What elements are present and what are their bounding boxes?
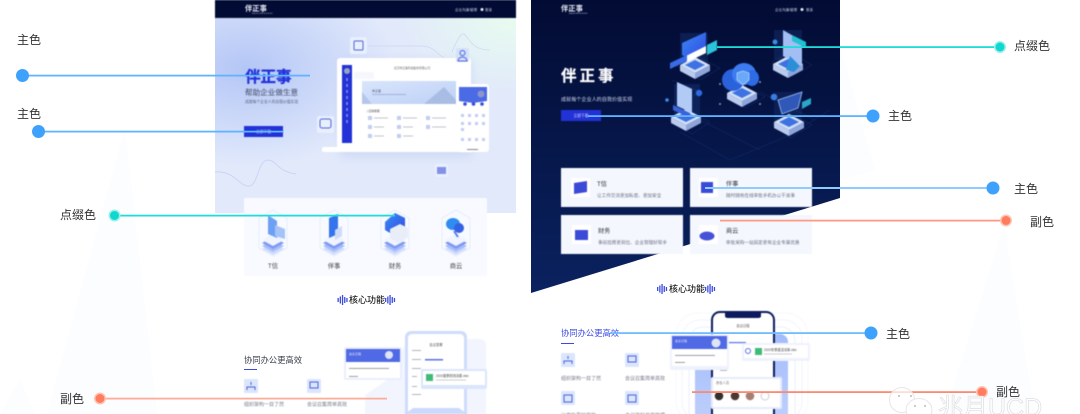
- hero heading: 伴正事: [245, 67, 292, 86]
- monitor tile: [670, 32, 717, 79]
- cart tile: [771, 92, 811, 136]
- callout: secondary colour attendees right: [692, 385, 1020, 399]
- callout: primary colour card right: 主色: [1014, 182, 1038, 196]
- card T信: [561, 168, 683, 207]
- phone mockup with meeting notice left: [344, 331, 487, 414]
- callout: secondary colour card right: 副色: [1030, 215, 1054, 229]
- dark hero button: 立即下载: [573, 113, 589, 118]
- card 伴事: [690, 168, 812, 207]
- hero heading: [245, 67, 299, 104]
- phone mockup with attendees right: 2020年季度活动单.xlsx: [764, 347, 797, 352]
- dark hero heading: 伴正事: [561, 66, 617, 85]
- card 财务: [561, 215, 683, 254]
- card 商云: [690, 215, 812, 254]
- top navigation bar light: 登录: [485, 7, 492, 12]
- card T信: T信: [597, 180, 607, 188]
- phone mockup with meeting notice left: 会议签署: [429, 342, 443, 347]
- 商云 item: 商云: [450, 261, 462, 270]
- card T信: 让工作交流更加私密、更加安全: [597, 192, 662, 199]
- T信 item: [259, 210, 287, 270]
- section heading right: core function: 核心功能: [669, 283, 705, 294]
- laptop dashboard mockup: 伴正事: [372, 88, 381, 93]
- callout: primary colour heading right: [610, 326, 910, 341]
- callout: primary colour heading right: 主色: [886, 327, 910, 341]
- callout: primary colour logo left: [16, 33, 310, 82]
- callout: secondary colour left: [60, 392, 387, 406]
- panel: light theme web page: [215, 0, 516, 414]
- top navigation bar light: 企业沟通/管理: [455, 7, 477, 12]
- card 伴事: 伴事: [726, 180, 738, 188]
- callout: secondary colour left: 副色: [60, 392, 84, 406]
- phone mockup with attendees right: 参会人员: [716, 380, 730, 385]
- phone mockup light: [457, 84, 489, 152]
- watermark: [890, 388, 1042, 414]
- section heading left: core function: 核心功能: [349, 294, 385, 305]
- callout: secondary colour attendees right: 副色: [996, 385, 1020, 399]
- product card with four icons: [244, 198, 487, 276]
- 商云 item: [442, 210, 470, 270]
- 财务 item: 财务: [389, 261, 402, 270]
- dark top nav: 企业沟通/管理: [775, 7, 797, 12]
- collaboration section right: 协同办公更高效: [561, 328, 620, 338]
- hero button: 立即下载: [256, 129, 271, 134]
- feature grid: [561, 353, 665, 414]
- hero heading: 成就每个企业人的自我价值实现: [245, 99, 298, 104]
- top navigation bar light: 伴正事: [245, 4, 268, 13]
- card 财务: 事前控费更到位、企业管理好帮手: [598, 239, 667, 246]
- phone mockup with attendees right: 会议日程: [736, 323, 750, 328]
- top navigation bar light: BANZHENGSHI: [252, 12, 273, 15]
- callout: primary colour button left: [17, 107, 283, 138]
- 财务 item: [381, 210, 409, 270]
- callout: accent colour right: 点缀色: [1014, 39, 1050, 53]
- callout: primary colour button right: 主色: [888, 109, 912, 123]
- 伴事 item: [320, 210, 348, 270]
- isometric illustration: [665, 30, 830, 160]
- dark top nav: BANZHENGSHI: [569, 12, 588, 15]
- laptop dashboard mockup: [322, 58, 472, 157]
- callout: primary colour logo left: 主色: [17, 33, 41, 47]
- card 财务: 财务: [598, 227, 610, 235]
- feature: meeting: 会议召集简单高效: [307, 401, 347, 408]
- dark hero button: [561, 110, 601, 121]
- callout: accent colour left: [60, 208, 395, 222]
- phone tile: [772, 30, 806, 78]
- phone mockup with meeting notice left: 2020度季别流动表.xlsx: [436, 373, 469, 378]
- callout: primary colour button left: 主色: [17, 107, 41, 121]
- hero background light: [215, 18, 516, 213]
- top navigation bar light: [215, 0, 516, 18]
- card 伴事: 随时随地在线审批手机办公干滚事: [726, 192, 795, 199]
- callout: primary colour card right: [705, 182, 1038, 196]
- card 商云: 审批采购一站搞定更有企业专属优惠: [726, 239, 800, 246]
- dark hero heading: 成就每个企业人的自我价值实现: [561, 96, 632, 103]
- 伴事 item: 伴事: [328, 261, 341, 270]
- dark top nav: 伴正事: [561, 4, 584, 13]
- dark top nav: [561, 4, 814, 15]
- laptop dashboard mockup: | 应用教程: [367, 109, 380, 113]
- laptop dashboard mockup: 北京伴正事科技股份有限公司: [394, 66, 430, 70]
- callout: accent colour right: [717, 39, 1050, 53]
- dark top nav: 登录: [806, 7, 814, 12]
- card 商云: 商云: [726, 227, 738, 235]
- hero heading: 帮助企业做生意: [245, 87, 299, 97]
- T信 item: T信: [268, 261, 278, 270]
- callout: primary colour button right: [588, 109, 912, 123]
- floating icons: [317, 37, 469, 177]
- section heading right: core function: [657, 283, 715, 294]
- callout: accent colour left: 点缀色: [60, 208, 96, 222]
- dark feature cards: [561, 168, 812, 254]
- phone mockup with attendees right: 会议日程: [675, 338, 687, 343]
- dark hero heading: [561, 66, 632, 103]
- phone mockup with meeting notice left: 会议日程: [349, 351, 361, 356]
- phone mockup with attendees right: [670, 311, 810, 414]
- panel: dark theme web page: [531, 0, 840, 414]
- collaboration section left: [244, 355, 347, 408]
- dark hero polygon: [531, 0, 840, 293]
- callout: secondary colour card right: [720, 214, 1054, 229]
- feature grid: 会议召集简单高效: [625, 375, 665, 382]
- feature: organisation: 组织架构一目了然: [244, 401, 284, 408]
- feature grid: 组织架构一目了然: [561, 375, 601, 382]
- collaboration section right: [561, 328, 665, 414]
- cloud shield tile: [719, 63, 761, 107]
- document tile: [665, 82, 702, 131]
- section heading left: core function: [338, 294, 395, 305]
- hero button: [244, 126, 283, 137]
- collaboration section left: 协同办公更高效: [244, 355, 303, 365]
